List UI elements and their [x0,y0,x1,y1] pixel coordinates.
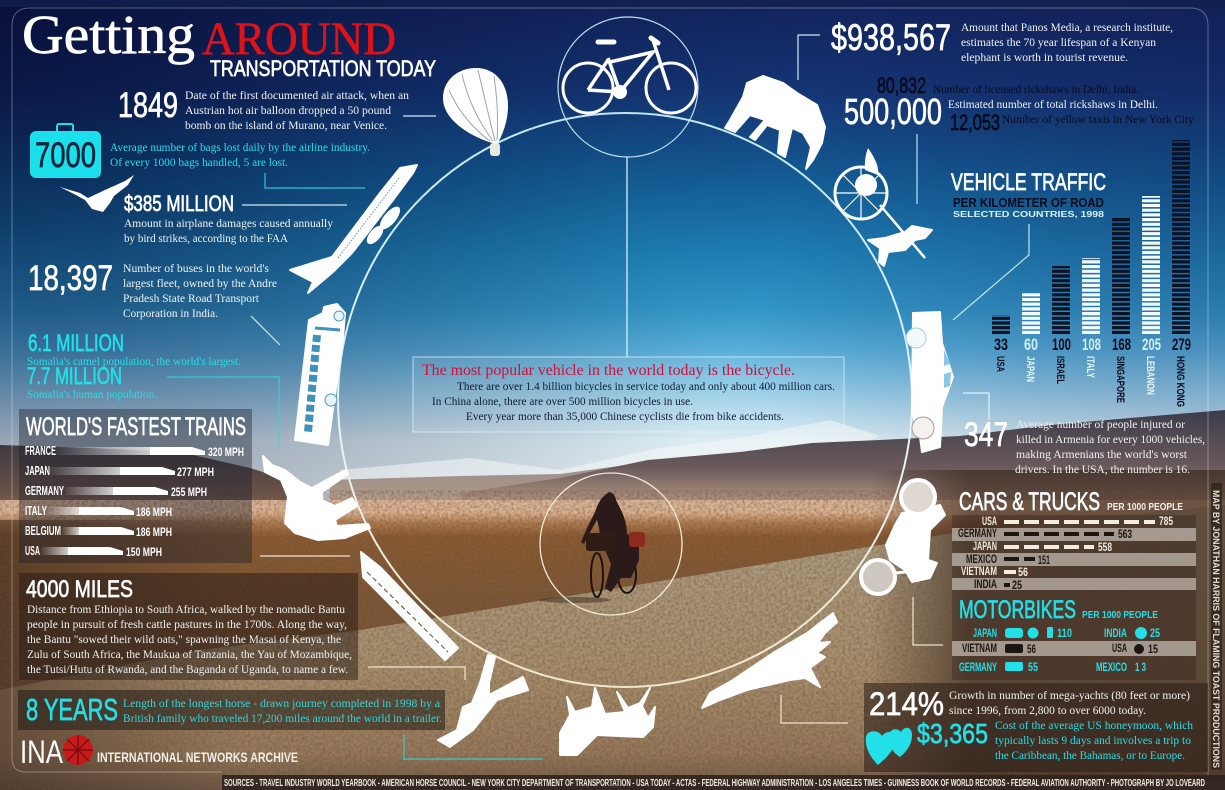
chart: cars and trucks: CARS & TRUCKS [959,488,1100,516]
text block: rickshaws and taxis: Number of yellow taxis in New York City [1002,114,1194,126]
chart: cars and trucks [952,488,1196,680]
panel: 4000 miles: 4000 MILES [26,576,133,603]
train row: Belgium [25,523,172,539]
icon: hearts [866,728,912,765]
row: Japan: 558 [1098,540,1112,554]
text block: 18,397 buses: Number of buses in the world's [123,263,270,275]
text block: 347 Armenia: 347 [964,416,1008,454]
bar: Italy 108: ITALY [1084,356,1096,378]
text block: 1849: Date of the first documented air attack, when an [185,90,409,102]
icon: camel [263,456,370,540]
panel: yachts and honeymoon: $3,365 [917,718,988,749]
row: India [974,577,1022,592]
logo: International Networks Archive: INTERNATIONAL NETWORKS ARCHIVE [97,749,298,765]
panel: yachts and honeymoon [864,683,1208,772]
text block: Somalia camels: Somalia's human population. [27,389,157,401]
bar: Hong Kong 279: HONG KONG [1174,356,1186,407]
train row: USA: 150 MPH [126,545,162,559]
row: Japan motorbikes: 110 [1057,626,1072,640]
bar: Lebanon 205: 205 [1142,335,1161,354]
text block: Somalia camels [27,330,279,450]
text block: 18,397 buses: Corporation in India. [123,308,218,320]
text block: 1849 [118,86,436,132]
train row: France: FRANCE [25,443,56,458]
title: TRANSPORTATION TODAY [210,56,436,81]
chart: vehicle traffic: PER KILOMETER OF ROAD [953,195,1104,210]
bar: Lebanon 205: LEBANON [1144,356,1156,395]
row: USA: USA [982,514,997,528]
bar: Japan 60 [1024,293,1038,382]
train row: France: 320 MPH [208,445,244,459]
panel: yachts and honeymoon: typically lasts 9 days and involves a trip to [995,735,1191,747]
vertical connector from bicycle circle to callout [626,157,628,357]
text block: $938,567 elephant: $938,567 [831,17,951,58]
text block: rickshaws and taxis: 80,832 [877,73,926,98]
bar: Singapore 168: 168 [1112,335,1131,354]
row: India motorbikes [1104,626,1160,640]
bar: Singapore 168: SINGAPORE [1114,356,1126,403]
text block: rickshaws and taxis: Estimated number of total rickshaws in Delhi. [948,99,1158,111]
panel: 4000 miles: people in pursuit of fresh cattle pastures in the 1700s. Along the way, [27,619,347,631]
train row: Japan: JAPAN [25,463,50,478]
text block: 18,397 buses: 18,397 [28,259,113,298]
text block: rickshaws and taxis: 12,053 [950,110,1000,135]
train row: Germany: GERMANY [25,483,64,498]
panel: world's fastest trains [19,409,252,563]
row: Germany: 563 [1118,527,1132,541]
text block: 347 Armenia [964,416,1205,476]
panel: yachts and honeymoon: since 1996, from 2,800 to over 6000 today. [949,705,1146,717]
text block: Somalia camels: 6.1 MILLION [28,330,124,357]
icon: bus [295,304,345,445]
text block: rickshaws and taxis [844,73,1194,204]
text block: $385 million: $385 MILLION [124,191,234,216]
bar: Israel 100 [1052,266,1071,384]
text block: lost bags: Average number of bags lost daily by the airline industry. [110,142,370,154]
train row: Italy: ITALY [25,503,47,518]
text block: 18,397 buses: Pradesh State Road Transport [123,293,260,305]
icon: rickshaw and runner [835,148,932,266]
row: Germany: GERMANY [958,526,997,540]
panel: yachts and honeymoon: 214% [869,686,944,722]
bar: Italy 108: 108 [1082,335,1101,354]
row: India motorbikes: 25 [1150,626,1160,640]
row: Mexico: 151 [1038,553,1050,567]
connector near motorcycle [913,597,943,645]
text block: 18,397 buses: largest fleet, owned by the Andre [123,278,277,290]
icon: train on the ring [361,552,458,660]
row: USA motorbikes: USA [1112,641,1127,655]
main circle ring [338,113,912,687]
row: Vietnam motorbikes [962,641,1036,656]
panel: yachts and honeymoon: Growth in number of mega-yachts (80 feet or more) [949,690,1190,702]
text block: 347 Armenia: making Armenians the world's worst [1016,449,1188,461]
chart: motorbikes [952,596,1196,674]
panel: 4000 miles: Distance from Ethiopia to South Africa, walked by the nomadic Bantu [27,604,345,616]
bar: Singapore 168 [1112,217,1131,403]
train row: Germany: 255 MPH [171,485,207,499]
train row: Germany [25,483,207,499]
icon: airplane [290,165,417,293]
text block: $938,567 elephant [798,17,1173,80]
icon: yacht [702,613,837,708]
text block: $385 million: by bird strikes, according to the FAA [124,233,289,245]
row: Germany motorbikes: GERMANY [959,660,997,674]
callout: bicycle fact box: There are over 1.4 billion bicycles in service today and only about 400 million cars. [457,381,835,393]
row: Vietnam: VIETNAM [961,564,997,578]
row: USA: 785 [1159,514,1173,528]
bar: Lebanon 205 [1142,196,1161,395]
row: Japan motorbikes: JAPAN [973,626,997,640]
bar: USA 33: 33 [994,335,1008,354]
train row: Japan [25,463,214,479]
bar: Italy 108 [1082,258,1101,378]
row: Germany motorbikes: 55 [1028,660,1038,674]
icon: cyclist inset circle [539,473,682,615]
row: Mexico motorbikes: MEXICO [1096,660,1127,674]
panel: yachts and honeymoon: Cost of the average US honeymoon, which [995,720,1193,732]
icon: bird [60,175,134,212]
text block: rickshaws and taxis: Number of licensed rickshaws in Delhi, India. [933,84,1139,96]
bar: USA 33: USA [994,356,1006,372]
chart: vehicle traffic: SELECTED COUNTRIES, 1998 [953,210,1105,219]
title [22,4,436,81]
icon: horse [560,688,655,755]
text block: $938,567 elephant: estimates the 70 year lifespan of a Kenyan [961,37,1156,49]
text block: $385 million: Amount in airplane damages caused annually [124,218,333,230]
text block: rickshaws and taxis: 500,000 [844,91,942,132]
icon: walking man [438,655,528,747]
text block: lost bags [110,142,370,188]
icon: car [906,312,953,452]
panel: yachts and honeymoon: the Caribbean, the Bahamas, or to Europe. [995,750,1185,762]
chart: vehicle traffic: VEHICLE TRAFFIC [951,169,1106,196]
text block: $385 million [124,191,347,245]
panel: 4000 miles [19,573,358,680]
chart: motorbikes: MOTORBIKES [959,596,1076,624]
bar: Hong Kong 279 [1172,140,1191,407]
text block: 347 Armenia: drivers. In the USA, the number is 16. [1015,464,1190,476]
row: USA motorbikes [1112,641,1158,656]
row: Mexico [966,552,1050,567]
chart: vehicle traffic [951,140,1191,407]
text block: 18,397 buses [28,259,280,345]
row: India motorbikes: INDIA [1104,626,1127,640]
text block: lost bags: Of every 1000 bags handled, 5 are lost. [110,157,288,169]
chart: motorbikes: PER 1000 PEOPLE [1082,610,1158,621]
bar: Israel 100: ISRAEL [1054,356,1066,384]
title: Getting [22,4,195,65]
row: Germany [958,526,1132,541]
row: Vietnam motorbikes: VIETNAM [962,641,997,655]
train row: Japan: 277 MPH [177,465,214,479]
icon: motorcycle [861,480,945,594]
row: India: 25 [1012,578,1022,592]
train row: Belgium: 186 MPH [136,525,172,539]
bar: Japan 60: 60 [1024,335,1038,354]
text block: Somalia camels: Somalia's camel population, the world's largest. [27,356,241,368]
row: Japan: JAPAN [973,539,997,553]
text block: 347 Armenia: Average number of people injured or [1016,419,1185,431]
panel: 4000 miles: Zulu of South Africa, the Maukua of Tanzania, the Yau of Mozambique, [27,649,352,661]
panel: 8 years: British family who traveled 17,200 miles around the world in a trailer. [123,713,442,725]
icon: elephant [725,76,825,169]
bar: Japan 60: JAPAN [1024,356,1036,382]
icon: suitcase with 7000 [30,124,101,178]
bar: Hong Kong 279: 279 [1172,335,1191,354]
panel: world's fastest trains: WORLD'S FASTEST TRAINS [26,413,246,441]
panel: 8 years [18,690,543,759]
row: USA [982,514,1173,528]
text block: 347 Armenia: killed in Armenia for every 1000 vehicles, [1016,434,1205,446]
connector near car [963,393,989,420]
text block: $938,567 elephant: Amount that Panos Media, a research institute, [961,22,1173,34]
row: USA motorbikes: 15 [1148,642,1158,656]
text block: 1849: bomb on the island of Murano, near Venice. [185,120,387,132]
train row: Italy: 186 MPH [136,505,172,519]
connector under camel [260,555,350,557]
callout: bicycle fact box [413,357,844,432]
title: AROUND [202,13,396,65]
connector near yacht [781,695,848,723]
text block: 1849: Austrian hot air balloon dropped a 50 pound [185,105,391,117]
train row: France [25,443,244,459]
train row: USA [25,543,162,559]
panel: 8 years: Length of the longest horse - drawn journey completed in 1998 by a [123,698,440,710]
vertical credit strip: MAP BY JONATHAN HARRIS OF FLAMING TOAST PRODUCTIONS [1211,490,1221,768]
icon: suitcase with 7000: 7000 [35,136,96,175]
train row: Belgium: BELGIUM [25,523,61,538]
row: Japan [973,539,1112,554]
row: Japan motorbikes [973,626,1072,640]
train row: USA: USA [25,543,40,558]
row: India: INDIA [974,577,997,591]
callout: bicycle fact box: In China alone, there are over 500 million bicycles in use. [432,396,693,408]
text block: Somalia camels: 7.7 MILLION [27,363,122,390]
row: Vietnam motorbikes: 56 [1027,642,1036,656]
callout: bicycle fact box: The most popular vehicle in the world today is the bicycle. [422,362,795,379]
row: Vietnam: 56 [1018,565,1028,579]
logo: International Networks Archive: INA [20,734,64,770]
bar: Israel 100: 100 [1052,335,1071,354]
logo: International Networks Archive [20,734,298,770]
connector near train [368,667,465,680]
row: Mexico: MEXICO [966,552,997,566]
panel: 8 years: 8 YEARS [26,692,118,727]
callout: bicycle fact box: Every year more than 35,000 Chinese cyclists die from bike accidents. [466,411,784,423]
text block: 1849: 1849 [118,86,178,125]
chart: cars and trucks: PER 1000 PEOPLE [1107,502,1183,513]
row: Mexico motorbikes: 1 3 [1135,660,1146,674]
panel: 4000 miles: the Bantu "sowed their wild oats," spawning the Masai of Kenya, the [27,634,341,646]
icon: bicycle in circle [558,17,698,157]
panel: 4000 miles: the Tutsi/Hutu of Rwanda, and the Baganda of Uganda, to name a few. [27,664,348,676]
bar: USA 33 [994,315,1008,372]
train row: Italy [25,503,172,519]
text block: $938,567 elephant: elephant is worth in tourist revenue. [961,52,1128,64]
icon: hot air balloon [443,68,508,156]
